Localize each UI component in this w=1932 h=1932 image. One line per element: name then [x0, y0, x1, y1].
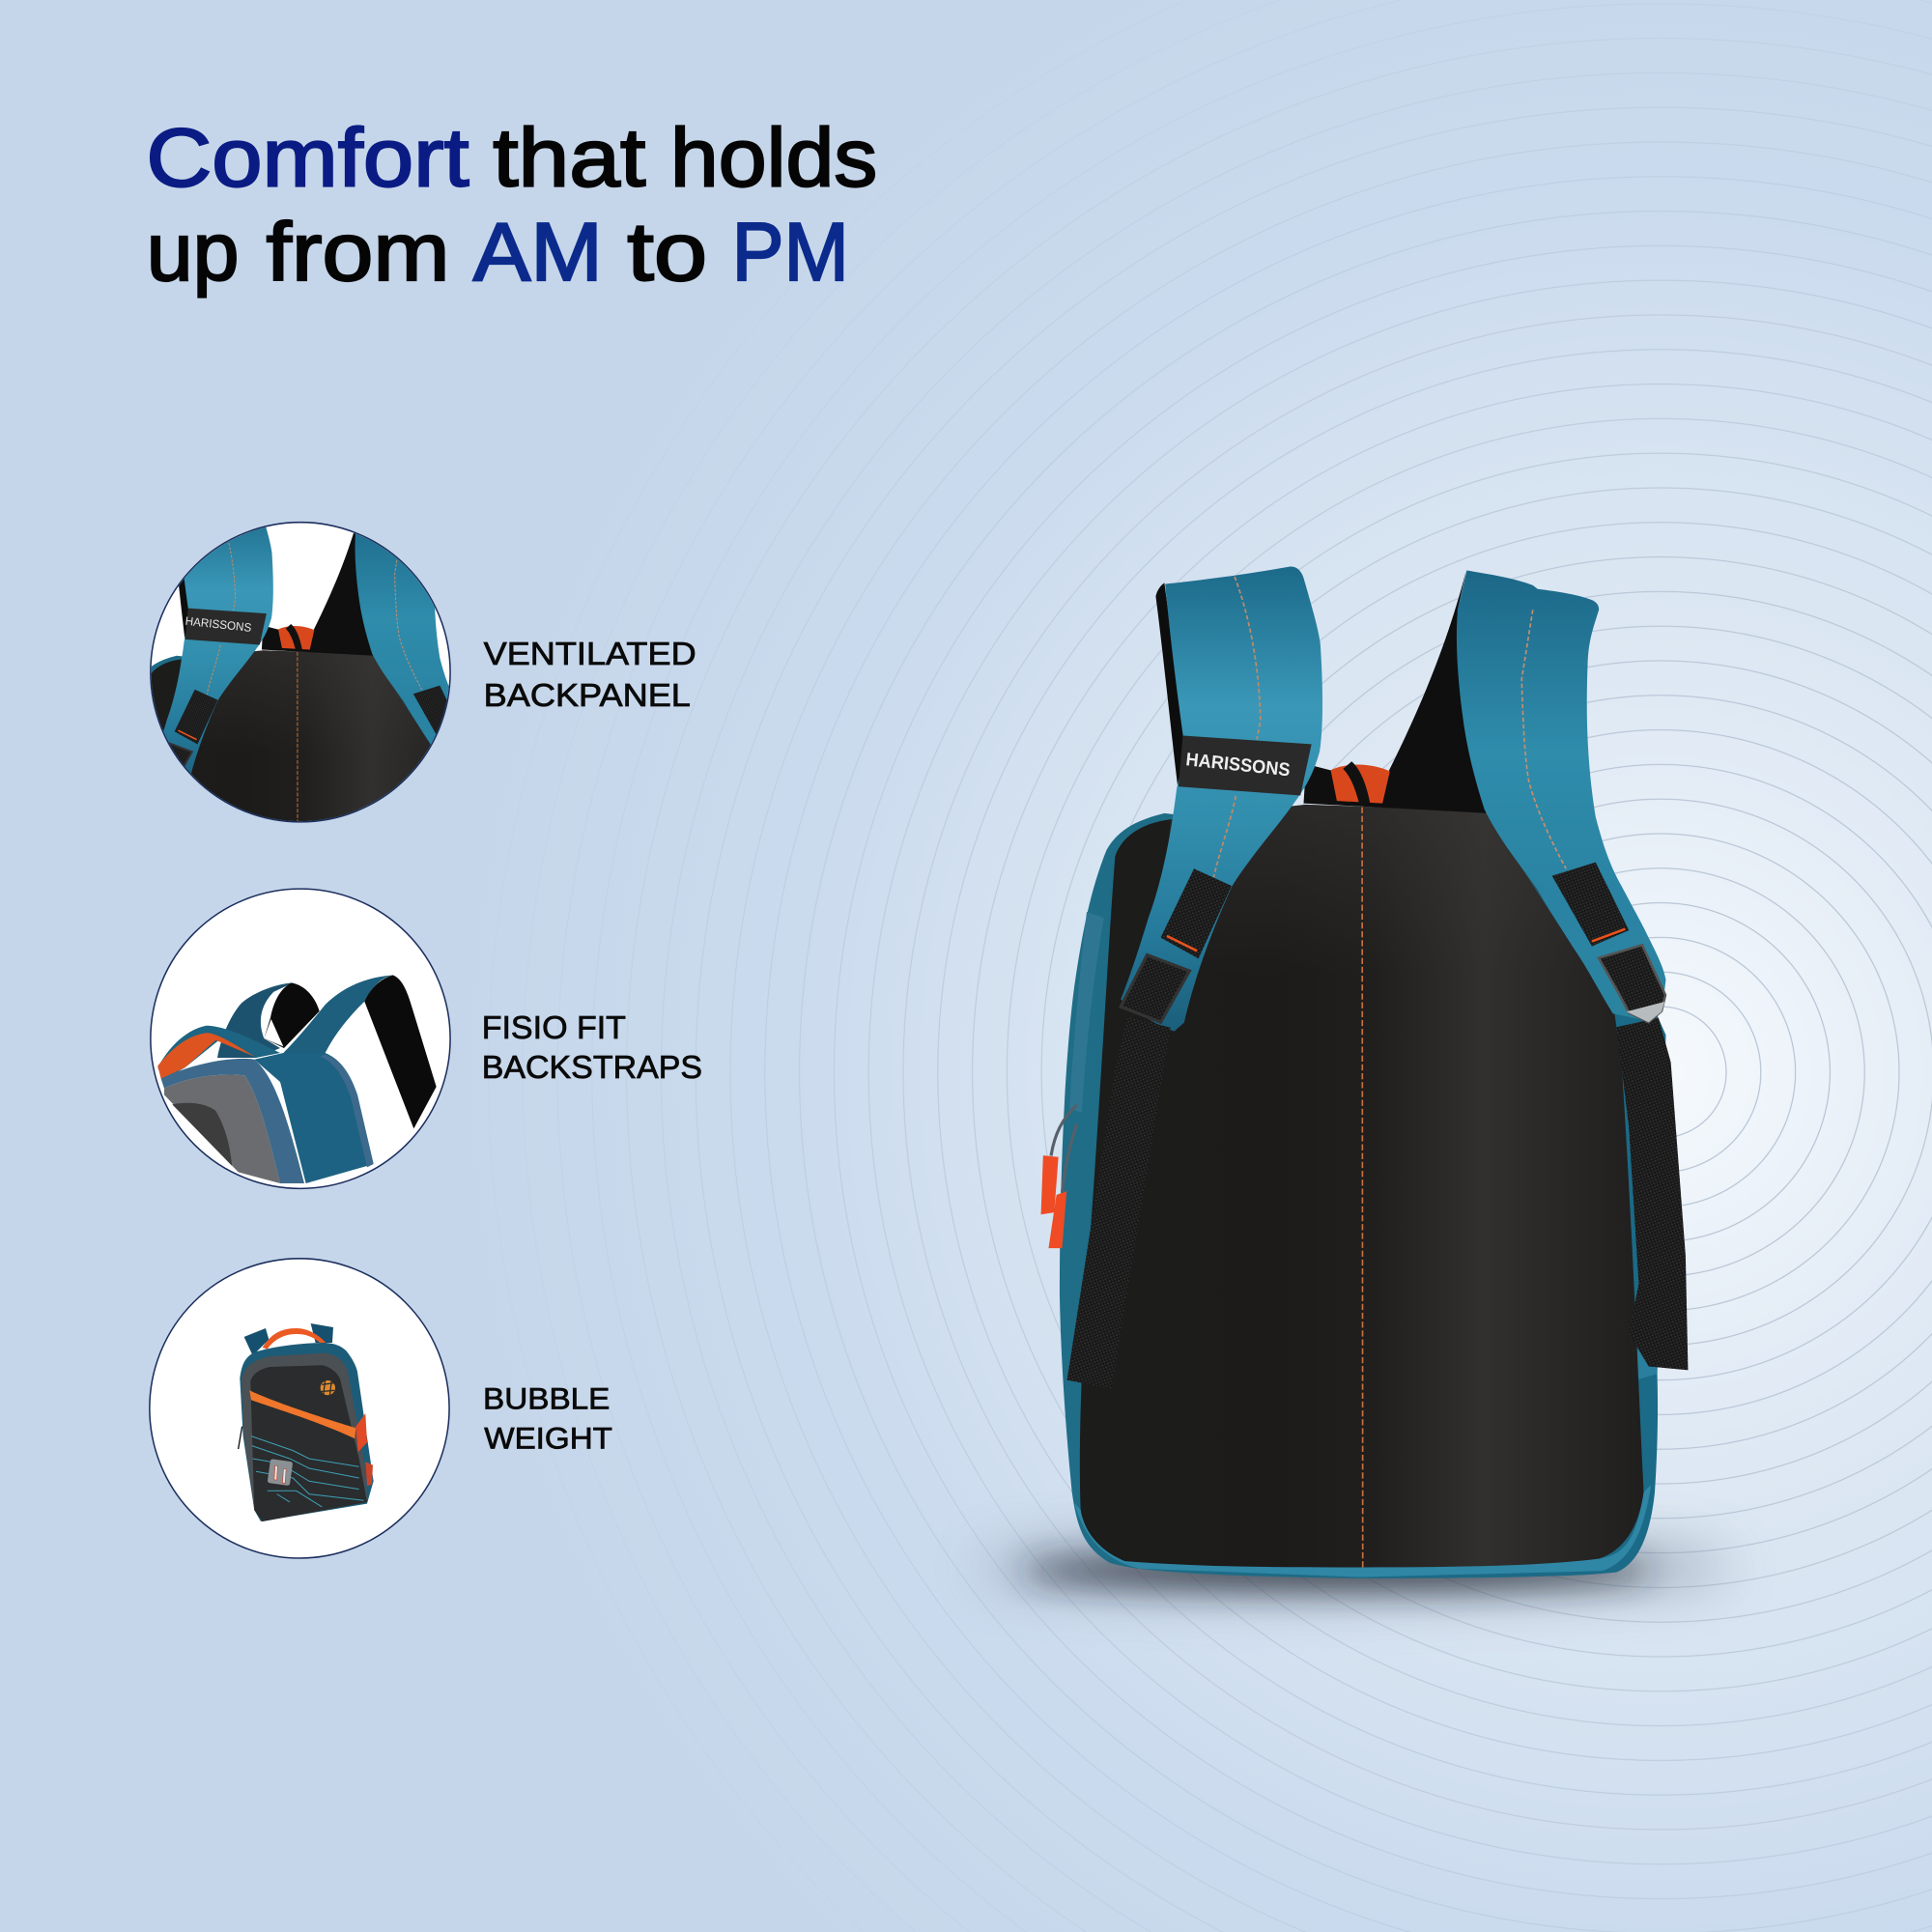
title: from: [267, 207, 450, 298]
ground shadow: [980, 1540, 1731, 1595]
title: that: [493, 113, 646, 205]
feature circle: bubble weight: [150, 1259, 449, 1558]
label: ventilated backpanel: [484, 637, 696, 714]
main backpack: [1041, 567, 1688, 1578]
title: [146, 113, 877, 298]
feature circle: ventilated backpanel: [150, 522, 451, 823]
feature circle: fisio fit backstraps: [151, 889, 450, 1188]
title: Comfort: [146, 113, 469, 205]
title: to: [627, 207, 707, 298]
label: ventilated backpanel: VENTILATED: [484, 637, 696, 672]
title: up: [147, 207, 239, 298]
feature circle: ventilated backpanel: HARISSONS: [185, 614, 252, 635]
title: PM: [732, 207, 849, 298]
label: fisio fit backstraps: [482, 1010, 702, 1086]
concentric rings: [626, 39, 1932, 1932]
label: bubble weight: [483, 1381, 612, 1455]
brand label: HARISSONS: [1185, 750, 1292, 781]
label: fisio fit backstraps: BACKSTRAPS: [482, 1050, 702, 1086]
label: bubble weight: BUBBLE: [483, 1381, 610, 1416]
label: fisio fit backstraps: FISIO FIT: [482, 1010, 626, 1046]
label: ventilated backpanel: BACKPANEL: [484, 678, 691, 714]
title: AM: [473, 207, 603, 298]
title: holds: [670, 113, 877, 205]
label: bubble weight: WEIGHT: [484, 1420, 612, 1455]
